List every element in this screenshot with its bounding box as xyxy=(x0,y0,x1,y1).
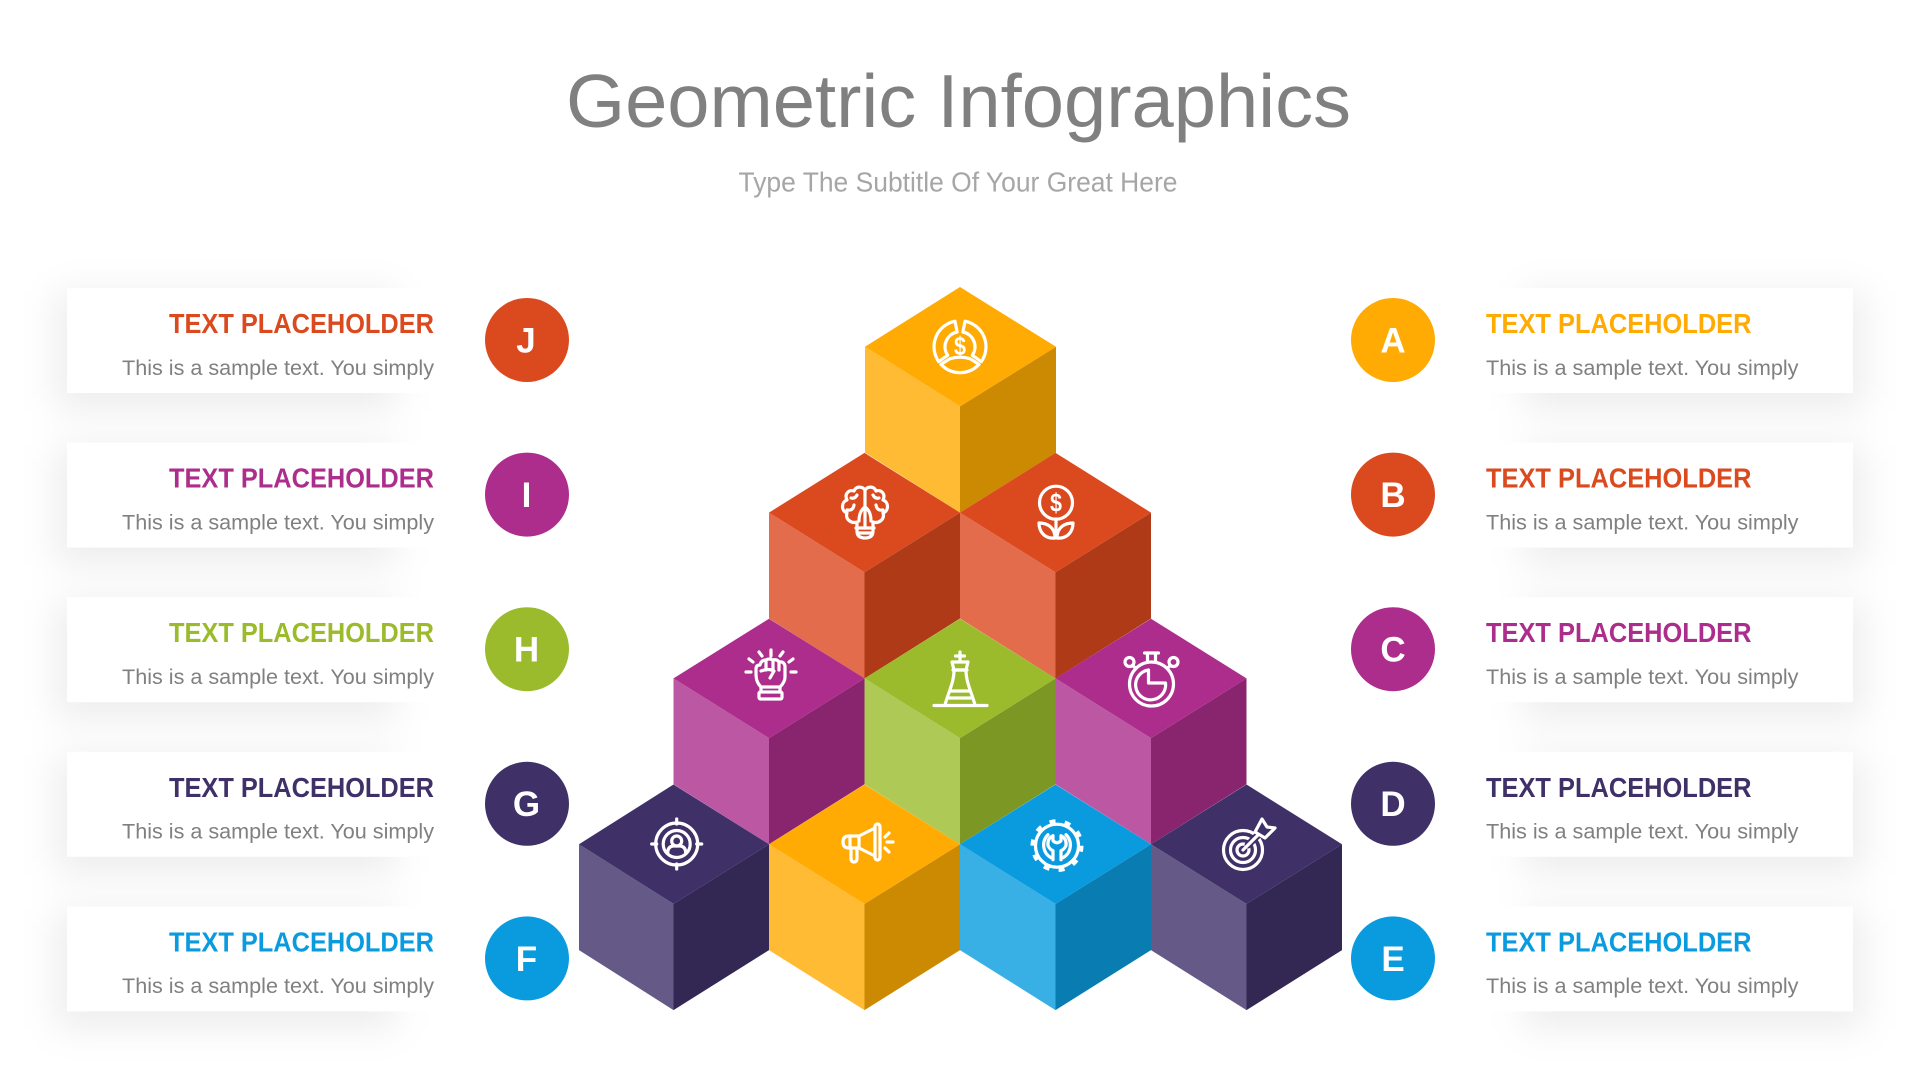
panel: item G: TEXT PLACEHOLDER xyxy=(169,772,434,803)
panel: item A: A xyxy=(1380,322,1406,360)
cube: blue xyxy=(960,784,1151,1010)
icon: gear wrench xyxy=(1032,821,1082,870)
panel: item D: TEXT PLACEHOLDER xyxy=(1486,772,1752,803)
panel: item E: E xyxy=(1381,940,1405,979)
panel: item H xyxy=(67,597,569,702)
cube: red left xyxy=(769,453,960,678)
panel: item E: This is a sample text. You simply xyxy=(1486,974,1799,998)
panel: item G: G xyxy=(513,785,540,824)
panel: item G xyxy=(67,752,569,857)
panel: item D: D xyxy=(1380,785,1406,824)
icon: money pie xyxy=(934,321,986,373)
panel: item J: TEXT PLACEHOLDER xyxy=(169,308,434,339)
panel: item F: This is a sample text. You simply xyxy=(122,974,434,998)
icon: money pie: $ xyxy=(954,331,966,361)
cube: amber lower xyxy=(769,784,960,1010)
panel: item I: I xyxy=(522,476,531,515)
subtitle: Type The Subtitle Of Your Great Here xyxy=(738,166,1178,198)
icon: target with arrow xyxy=(1224,819,1275,870)
icon: chess king xyxy=(934,652,987,706)
panel: item J xyxy=(67,288,569,393)
icon: money plant: $ xyxy=(1050,488,1062,518)
panel: item B: B xyxy=(1380,476,1406,515)
panel: item C: This is a sample text. You simply xyxy=(1486,665,1799,689)
title: Geometric Infographics xyxy=(566,59,1351,143)
icon: money plant xyxy=(1039,486,1073,538)
cube: top amber xyxy=(865,287,1056,513)
panel: item A: This is a sample text. You simply xyxy=(1486,356,1799,380)
panel: item D: This is a sample text. You simply xyxy=(1486,819,1799,843)
panel: item G: This is a sample text. You simply xyxy=(122,819,434,843)
icon: megaphone xyxy=(843,824,893,862)
panel: item C: TEXT PLACEHOLDER xyxy=(1486,617,1752,648)
panel: item A xyxy=(1351,288,1853,393)
icon: raised fist xyxy=(746,650,796,699)
panel: item H: This is a sample text. You simply xyxy=(122,665,434,689)
panel: item I: This is a sample text. You simply xyxy=(122,511,434,535)
panel: item A: TEXT PLACEHOLDER xyxy=(1486,308,1752,339)
panel: item I: TEXT PLACEHOLDER xyxy=(169,463,434,494)
icon: person target xyxy=(652,819,702,869)
panel: item B xyxy=(1351,443,1853,548)
cube: red right xyxy=(960,453,1151,678)
cube: green centre xyxy=(864,619,1056,844)
panel: item F xyxy=(67,906,569,1011)
cube: purple left xyxy=(674,619,864,844)
panel: item E: TEXT PLACEHOLDER xyxy=(1486,926,1752,957)
panel: item C xyxy=(1351,597,1853,702)
panel: item F: TEXT PLACEHOLDER xyxy=(169,926,434,957)
cube: purple right xyxy=(1056,619,1246,844)
panel: item B: This is a sample text. You simply xyxy=(1486,511,1799,535)
icon: stopwatch xyxy=(1125,653,1178,706)
isometric cube pyramid xyxy=(579,287,1342,1010)
panel: item I xyxy=(67,443,569,548)
panel: item F: F xyxy=(516,940,537,979)
panel: item E xyxy=(1351,906,1853,1011)
panel: item J: This is a sample text. You simply xyxy=(122,356,434,380)
panel: item H: TEXT PLACEHOLDER xyxy=(169,617,434,648)
panel: item C: C xyxy=(1380,631,1406,670)
panel: item B: TEXT PLACEHOLDER xyxy=(1486,463,1752,494)
panel: item D xyxy=(1351,752,1853,857)
cube: navy left xyxy=(579,784,769,1010)
cube: navy right xyxy=(1151,784,1342,1010)
panel: item H: H xyxy=(514,631,539,670)
panel: item J: J xyxy=(516,322,536,360)
icon: brain bulb xyxy=(842,487,888,538)
